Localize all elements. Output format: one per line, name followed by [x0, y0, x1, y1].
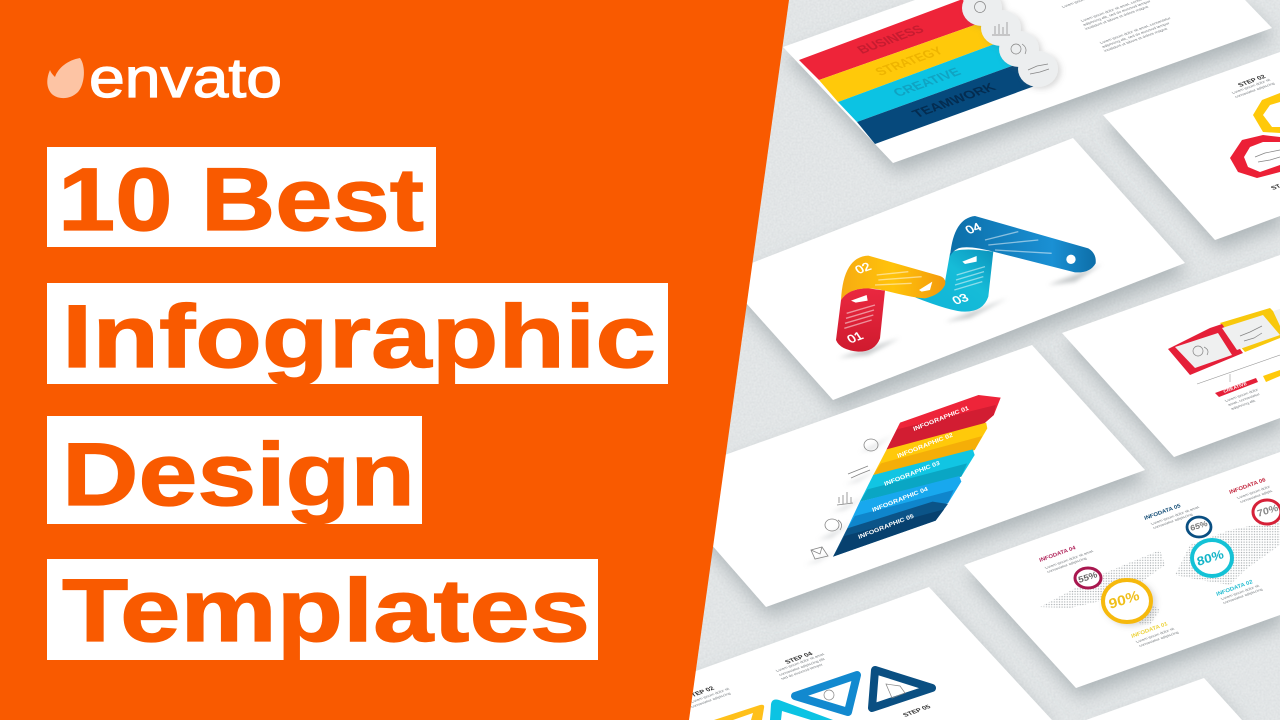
ribbon shadows — [838, 264, 1102, 358]
slide: square frames: amet, consectetur — [1226, 392, 1262, 407]
yellow bar STRATEGY — [819, 22, 1000, 102]
CREATIVE pill — [1215, 378, 1258, 397]
arrow labels: INFOGRAPHIC 01 — [912, 405, 970, 433]
slide: octagons — [1103, 52, 1280, 240]
title line: Design: Design — [62, 424, 415, 524]
stat 65%: 65% — [1189, 518, 1209, 533]
arrow labels — [857, 405, 970, 541]
frame icons — [1193, 326, 1262, 356]
grey inner tiles — [1175, 333, 1232, 368]
arrow labels: INFOGRAPHIC 02 — [896, 432, 954, 460]
red bar BUSINESS — [799, 0, 983, 80]
map labels: INFODATA 05 — [1144, 503, 1182, 522]
red bar BUSINESS: BUSINESS — [854, 22, 927, 56]
slide: triangles — [660, 587, 1052, 720]
blue triangle — [795, 675, 857, 712]
map labels: INFODATA 01 — [1131, 621, 1169, 640]
step labels: STEP 04 — [784, 651, 815, 665]
slide: zigzag ribbon — [721, 138, 1185, 400]
slide: square frames — [1062, 255, 1280, 457]
title line: 10 Best: 10 Best — [58, 149, 424, 249]
lorem copy: adipiscing elit, sed do eiusmod tempor — [1100, 21, 1171, 49]
red frame — [1168, 324, 1243, 375]
title line: Templates: Templates — [62, 560, 590, 660]
stat 90% — [1103, 580, 1151, 622]
slide: bottom right — [1086, 678, 1242, 720]
stat 80%: 80% — [1195, 547, 1225, 569]
arrow labels: INFOGRAPHIC 05 — [857, 513, 915, 541]
lorem copy — [1060, 0, 1172, 53]
navy triangle — [872, 670, 932, 708]
slide: square frames: adipiscing elit — [1229, 398, 1257, 411]
slide: octagons: consectetur adipiscing — [1233, 81, 1276, 99]
navy bar TEAMWORK — [857, 63, 1043, 144]
map copy: consectetur adipiscing — [1221, 587, 1264, 605]
map copy: Lorem ipsum dolor sit — [1134, 626, 1176, 644]
map labels: INFODATA 06 — [1229, 477, 1267, 496]
logo wordmark: envato — [89, 46, 282, 109]
slide: triangles: Lorem ipsum dolor sit amet — [774, 652, 826, 673]
stat 80% — [1192, 540, 1232, 576]
map copy: consectetur adipiscing — [1045, 556, 1088, 574]
ribbon numbers — [845, 221, 984, 346]
map copy — [1043, 484, 1273, 648]
icon discs — [962, 0, 1058, 87]
cyan triangle — [770, 700, 833, 720]
map copy: consectetur adipis — [1238, 489, 1273, 504]
ribbon numbers: 04 — [963, 221, 984, 236]
zigzag ribbon — [836, 216, 1096, 352]
yellow octagon — [1253, 93, 1280, 133]
map labels — [1039, 477, 1267, 640]
map copy: Lorem ipsum dolor — [1235, 484, 1272, 500]
slide: triangles: sed do eiusmod tempor — [779, 662, 824, 681]
arrow bars — [833, 395, 1001, 557]
yellow pill — [1263, 370, 1280, 382]
logo leaf — [47, 58, 84, 98]
stat 70% — [1253, 500, 1280, 524]
arrow labels: INFOGRAPHIC 04 — [871, 486, 929, 514]
envato logo — [47, 46, 282, 109]
map copy: consectetur adipiscing — [1151, 512, 1194, 530]
slide: square frames: Lorem ipsum dolor — [1223, 387, 1260, 403]
map copy: Lorem ipsum dolor sit amet — [1149, 505, 1201, 526]
CREATIVE pill: CREATIVE — [1223, 381, 1248, 394]
cyan bar CREATIVE — [838, 42, 1020, 122]
slide: triangles: consectetur adipiscing — [689, 691, 732, 709]
slide: octagons: Lorem ipsum dolor sit — [1230, 77, 1272, 95]
map copy: Lorem ipsum dolor sit amet — [1043, 549, 1095, 570]
third tile — [1273, 309, 1280, 326]
slide: arrow stack — [655, 345, 1145, 607]
lorem copy: incididunt ut labore et dolore magna — [1102, 26, 1169, 53]
step labels: STEP 02 — [1237, 74, 1268, 88]
lorem copy: incididunt ut labore et dolore magna — [1083, 4, 1150, 31]
slide: triangles: STEP 05 — [902, 704, 933, 718]
stat 90%: 90% — [1107, 588, 1141, 613]
map labels: INFODATA 04 — [1039, 545, 1077, 564]
ribbon numbers: 03 — [950, 291, 971, 307]
ribbon icons — [851, 255, 1076, 303]
stat 55%: 55% — [1077, 569, 1099, 585]
stat 55% — [1075, 568, 1101, 588]
red octagon — [1230, 135, 1280, 178]
orange panel — [0, 0, 789, 720]
yellow frame — [1220, 308, 1280, 352]
connector — [1197, 355, 1280, 384]
lorem copy: Lorem ipsum dolor sit amet, consectetur — [1098, 16, 1172, 45]
slide: ribbon bars — [783, 0, 1272, 163]
slide: triangles: consectetur adipiscing elit — [777, 657, 827, 677]
stat 70%: 70% — [1256, 503, 1279, 520]
navy bar TEAMWORK: TEAMWORK — [909, 80, 1000, 120]
ribbon copy lines — [844, 232, 1052, 328]
map labels: INFODATA 02 — [1216, 579, 1254, 598]
slide: world map stats — [964, 452, 1280, 688]
slide: triangles: TEP 02 — [690, 686, 716, 698]
map copy: consectetur adipiscing — [1137, 630, 1180, 648]
stat 65% — [1187, 517, 1211, 537]
dotted map — [1040, 520, 1280, 625]
icon streak shadows — [805, 435, 893, 565]
ribbon numbers: 01 — [845, 330, 866, 346]
map copy: Lorem ipsum dolor sit — [1219, 583, 1261, 601]
cyan bar CREATIVE: CREATIVE — [890, 65, 964, 99]
title line: Infographic: Infographic — [62, 286, 656, 386]
handshake icon — [1255, 150, 1280, 162]
yellow bar STRATEGY: STRATEGY — [872, 44, 946, 78]
yellow triangle — [714, 705, 764, 720]
arrow icons — [811, 439, 878, 559]
arrow labels: INFOGRAPHIC 03 — [883, 460, 941, 488]
slide: triangles: Lorem ipsum dolor sit — [689, 686, 731, 704]
ribbon numbers: 02 — [853, 260, 874, 276]
disc icons — [974, 2, 1049, 74]
triangle icons — [824, 684, 905, 700]
